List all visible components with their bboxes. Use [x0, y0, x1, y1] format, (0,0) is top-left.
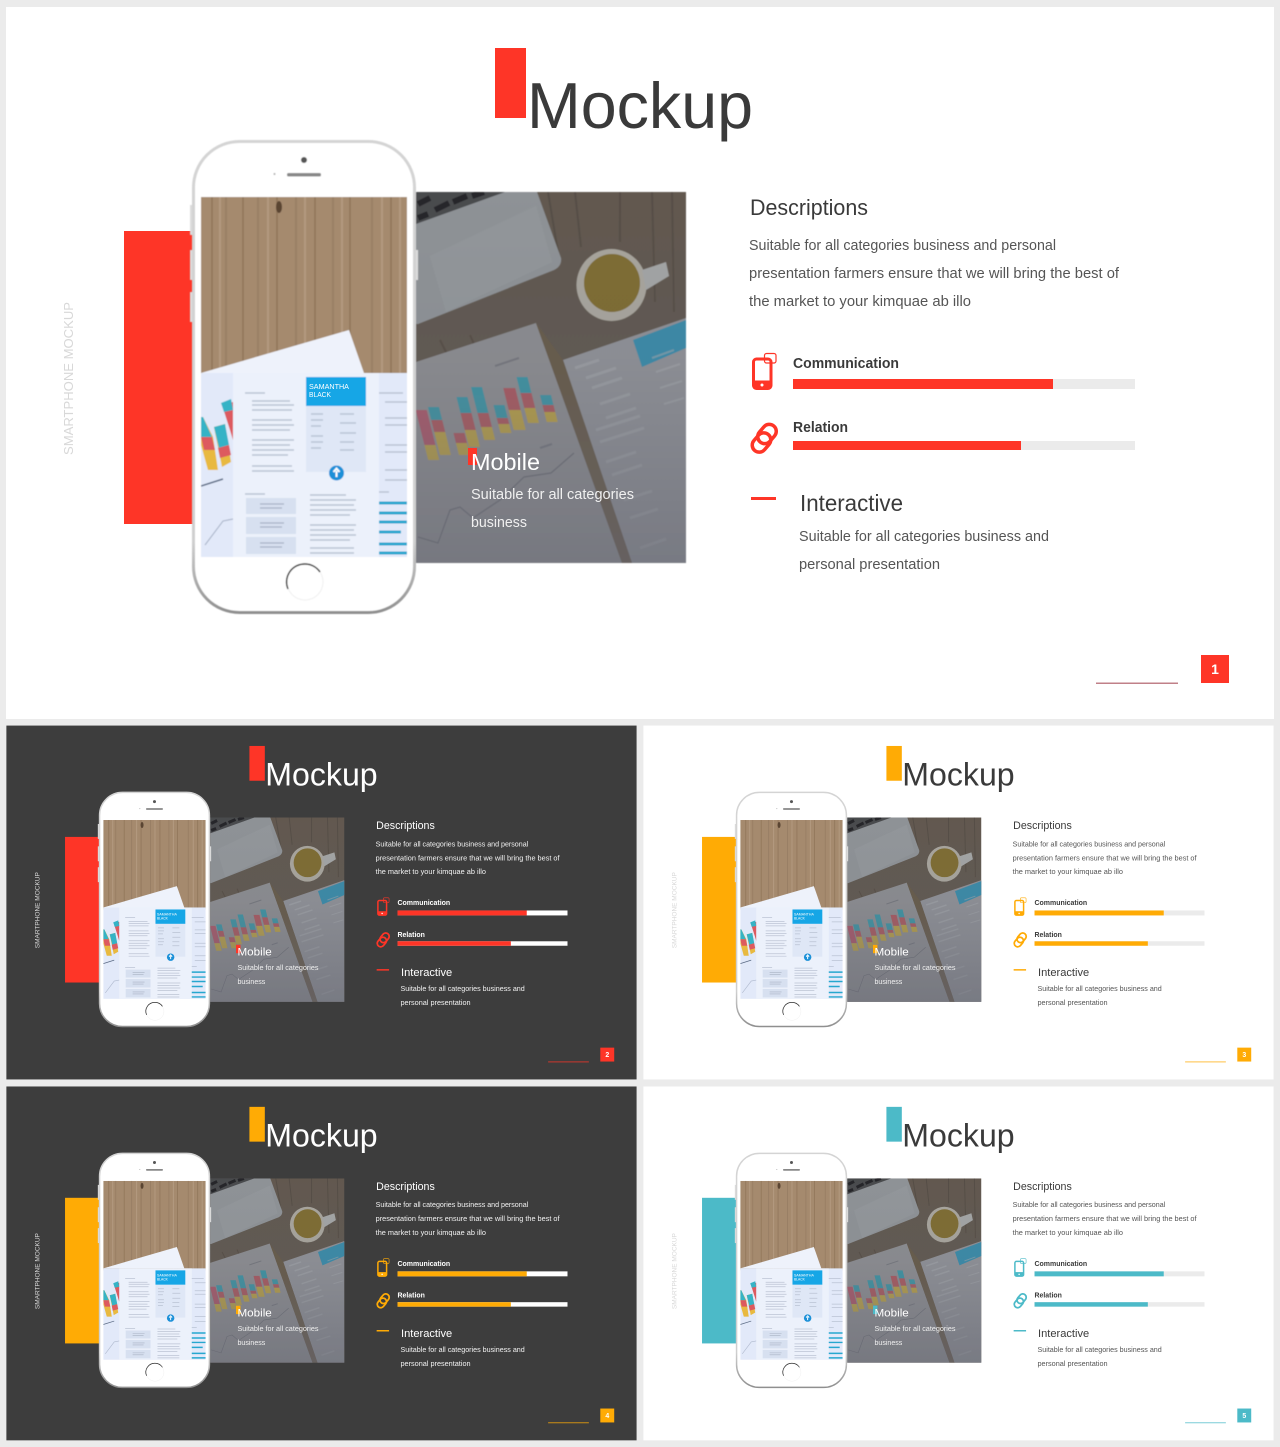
accent block behind phone	[65, 1198, 100, 1343]
resume heading on phone: SAMANTHA	[157, 912, 178, 916]
title accent block	[495, 48, 526, 118]
slide background	[643, 1086, 1274, 1440]
slide background	[6, 1086, 637, 1440]
communication label: Communication	[1035, 1259, 1087, 1268]
description line 3: the market to your kimquae ab illo	[376, 1228, 486, 1237]
communication bar value	[793, 379, 1053, 389]
resume name on phone: BLACK	[157, 1277, 169, 1281]
icon: phone with chat bubble	[754, 354, 776, 388]
footer line	[1185, 1061, 1226, 1063]
footer line	[1096, 682, 1178, 684]
photo caption accent	[873, 1306, 877, 1314]
communication bar value	[398, 1271, 527, 1276]
footer line	[548, 1061, 589, 1063]
title accent block	[886, 746, 902, 781]
title: Mockup	[902, 757, 1015, 793]
interactive heading: Interactive	[401, 1328, 452, 1340]
footer line	[1185, 1421, 1226, 1424]
interactive line 1: Suitable for all categories business and	[1038, 984, 1162, 993]
page number: 1	[1211, 661, 1219, 677]
relation bar track	[398, 1302, 567, 1307]
slide background	[6, 726, 637, 1079]
phone mockup and photo	[190, 142, 686, 612]
panel: slide 5 white teal	[643, 1086, 1274, 1440]
photo caption line 1: Suitable for all categories	[237, 1324, 319, 1333]
page number box	[1201, 655, 1229, 683]
photo caption heading: Mobile	[237, 1308, 272, 1320]
icon: chain link	[1013, 1292, 1028, 1309]
relation label: Relation	[398, 930, 425, 939]
interactive dash	[1014, 969, 1026, 971]
accent block behind phone	[65, 837, 100, 983]
communication bar track	[793, 379, 1135, 389]
description line 3: the market to your kimquae ab illo	[376, 867, 486, 876]
interactive line 2: personal presentation	[401, 1359, 471, 1368]
interactive heading: Interactive	[1038, 1328, 1089, 1340]
relation bar value	[398, 1302, 511, 1307]
communication bar track	[398, 1271, 567, 1276]
description line 2: presentation farmers ensure that we will bring the best of	[376, 1214, 560, 1223]
interactive heading: Interactive	[1038, 967, 1089, 979]
title accent block	[249, 1107, 265, 1142]
photo caption heading: Mobile	[237, 947, 272, 959]
vertical label: SMARTPHONE MOCKUP	[35, 1233, 42, 1309]
photo caption accent	[236, 945, 240, 953]
interactive line 2: personal presentation	[1038, 1359, 1108, 1368]
icon: chain link	[376, 932, 391, 948]
page number: 4	[605, 1413, 609, 1420]
photo caption line 2: business	[237, 977, 266, 986]
photo caption line 1: Suitable for all categories	[471, 486, 634, 503]
accent block behind phone	[702, 1198, 737, 1343]
resume heading on phone: SAMANTHA	[794, 1273, 815, 1277]
phone mockup and photo	[735, 1153, 981, 1387]
interactive line 2: personal presentation	[401, 998, 471, 1007]
icon: phone with chat bubble	[378, 898, 389, 915]
communication bar value	[398, 910, 527, 915]
interactive dash	[751, 497, 776, 500]
relation bar track	[793, 441, 1135, 450]
interactive line 1: Suitable for all categories business and	[401, 1345, 525, 1354]
photo caption accent	[873, 945, 877, 953]
descriptions heading: Descriptions	[750, 195, 868, 220]
description line 3: the market to your kimquae ab illo	[1013, 867, 1123, 876]
photo caption line 1: Suitable for all categories	[874, 1324, 956, 1333]
icon: phone with chat bubble	[378, 1259, 389, 1276]
icon: phone with chat bubble	[1015, 1259, 1026, 1276]
resume name on phone: BLACK	[157, 916, 169, 920]
resume name on phone: BLACK	[309, 392, 331, 399]
descriptions heading: Descriptions	[376, 820, 435, 832]
description line 2: presentation farmers ensure that we will bring the best of	[376, 853, 560, 862]
photo caption accent	[236, 1306, 240, 1314]
relation bar value	[793, 441, 1021, 450]
photo caption line 2: business	[874, 977, 903, 986]
communication bar value	[1035, 1271, 1164, 1276]
resume heading on phone: SAMANTHA	[309, 384, 349, 391]
description line 1: Suitable for all categories business and personal	[749, 237, 1056, 254]
relation label: Relation	[398, 1291, 425, 1300]
description line 2: presentation farmers ensure that we will bring the best of	[749, 265, 1120, 282]
panel: slide 3 white amber	[643, 726, 1274, 1079]
photo caption heading: Mobile	[874, 1308, 909, 1320]
descriptions heading: Descriptions	[376, 1181, 435, 1193]
panel: slide 1 white red	[6, 7, 1274, 719]
phone mockup and photo	[98, 1153, 344, 1387]
description line 1: Suitable for all categories business and personal	[1013, 839, 1166, 848]
page number: 3	[1242, 1052, 1246, 1059]
title: Mockup	[265, 1118, 378, 1154]
relation bar track	[1035, 1302, 1204, 1307]
interactive dash	[1014, 1330, 1026, 1332]
relation label: Relation	[1035, 930, 1062, 939]
resume heading on phone: SAMANTHA	[157, 1273, 178, 1277]
relation label: Relation	[793, 420, 848, 436]
page number: 2	[605, 1052, 609, 1059]
icon: chain link	[1013, 932, 1028, 948]
interactive line 1: Suitable for all categories business and	[799, 528, 1049, 545]
accent block behind phone	[124, 231, 194, 524]
communication bar track	[1035, 1271, 1204, 1276]
interactive line 2: personal presentation	[1038, 998, 1108, 1007]
descriptions heading: Descriptions	[1013, 1181, 1072, 1193]
vertical label: SMARTPHONE MOCKUP	[35, 872, 42, 948]
relation bar value	[398, 941, 511, 946]
relation bar value	[1035, 1302, 1148, 1307]
title: Mockup	[527, 69, 753, 142]
vertical label: SMARTPHONE MOCKUP	[61, 302, 76, 455]
description line 2: presentation farmers ensure that we will bring the best of	[1013, 1214, 1197, 1223]
slide background	[6, 7, 1274, 719]
resume name on phone: BLACK	[794, 916, 806, 920]
phone mockup and photo	[735, 792, 981, 1027]
photo caption heading: Mobile	[471, 449, 540, 475]
interactive line 1: Suitable for all categories business and	[1038, 1345, 1162, 1354]
photo caption line 2: business	[237, 1338, 266, 1347]
page number box	[600, 1409, 614, 1422]
page number box	[600, 1048, 614, 1062]
photo caption line 2: business	[874, 1338, 903, 1347]
vertical label: SMARTPHONE MOCKUP	[672, 1233, 679, 1309]
description line 2: presentation farmers ensure that we will bring the best of	[1013, 853, 1197, 862]
footer line	[548, 1421, 589, 1424]
icon: phone with chat bubble	[1015, 898, 1026, 915]
description line 1: Suitable for all categories business and personal	[376, 1200, 529, 1209]
interactive line 2: personal presentation	[799, 556, 940, 573]
photo caption accent	[468, 448, 477, 465]
resume name on phone: BLACK	[794, 1277, 806, 1281]
description line 1: Suitable for all categories business and personal	[376, 839, 529, 848]
title: Mockup	[265, 757, 378, 793]
interactive dash	[377, 1330, 389, 1332]
vertical label: SMARTPHONE MOCKUP	[672, 872, 679, 948]
photo caption heading: Mobile	[874, 947, 909, 959]
panel: slide 2 dark red	[6, 726, 637, 1079]
icon: chain link	[749, 421, 779, 455]
icon: chain link	[376, 1292, 391, 1309]
relation bar value	[1035, 941, 1148, 946]
interactive dash	[377, 969, 389, 971]
photo caption line 1: Suitable for all categories	[237, 963, 319, 972]
description line 3: the market to your kimquae ab illo	[749, 293, 971, 310]
communication label: Communication	[1035, 898, 1087, 907]
communication bar track	[1035, 910, 1204, 915]
title accent block	[249, 746, 265, 781]
page number box	[1237, 1048, 1251, 1062]
description line 3: the market to your kimquae ab illo	[1013, 1228, 1123, 1237]
interactive heading: Interactive	[401, 967, 452, 979]
communication label: Communication	[398, 898, 450, 907]
accent block behind phone	[702, 837, 737, 983]
communication label: Communication	[398, 1259, 450, 1268]
description line 1: Suitable for all categories business and personal	[1013, 1200, 1166, 1209]
communication bar value	[1035, 910, 1164, 915]
title: Mockup	[902, 1118, 1015, 1154]
phone mockup and photo	[98, 792, 344, 1027]
photo caption line 1: Suitable for all categories	[874, 963, 956, 972]
photo caption line 2: business	[471, 514, 527, 531]
descriptions heading: Descriptions	[1013, 820, 1072, 832]
relation bar track	[1035, 941, 1204, 946]
panel: slide 4 dark amber	[6, 1086, 637, 1440]
title accent block	[886, 1107, 902, 1142]
communication bar track	[398, 910, 567, 915]
page number: 5	[1242, 1413, 1246, 1420]
resume heading on phone: SAMANTHA	[794, 912, 815, 916]
page number box	[1237, 1409, 1251, 1422]
interactive line 1: Suitable for all categories business and	[401, 984, 525, 993]
communication label: Communication	[793, 356, 899, 372]
relation label: Relation	[1035, 1291, 1062, 1300]
slide background	[643, 726, 1274, 1079]
interactive heading: Interactive	[800, 490, 903, 516]
relation bar track	[398, 941, 567, 946]
